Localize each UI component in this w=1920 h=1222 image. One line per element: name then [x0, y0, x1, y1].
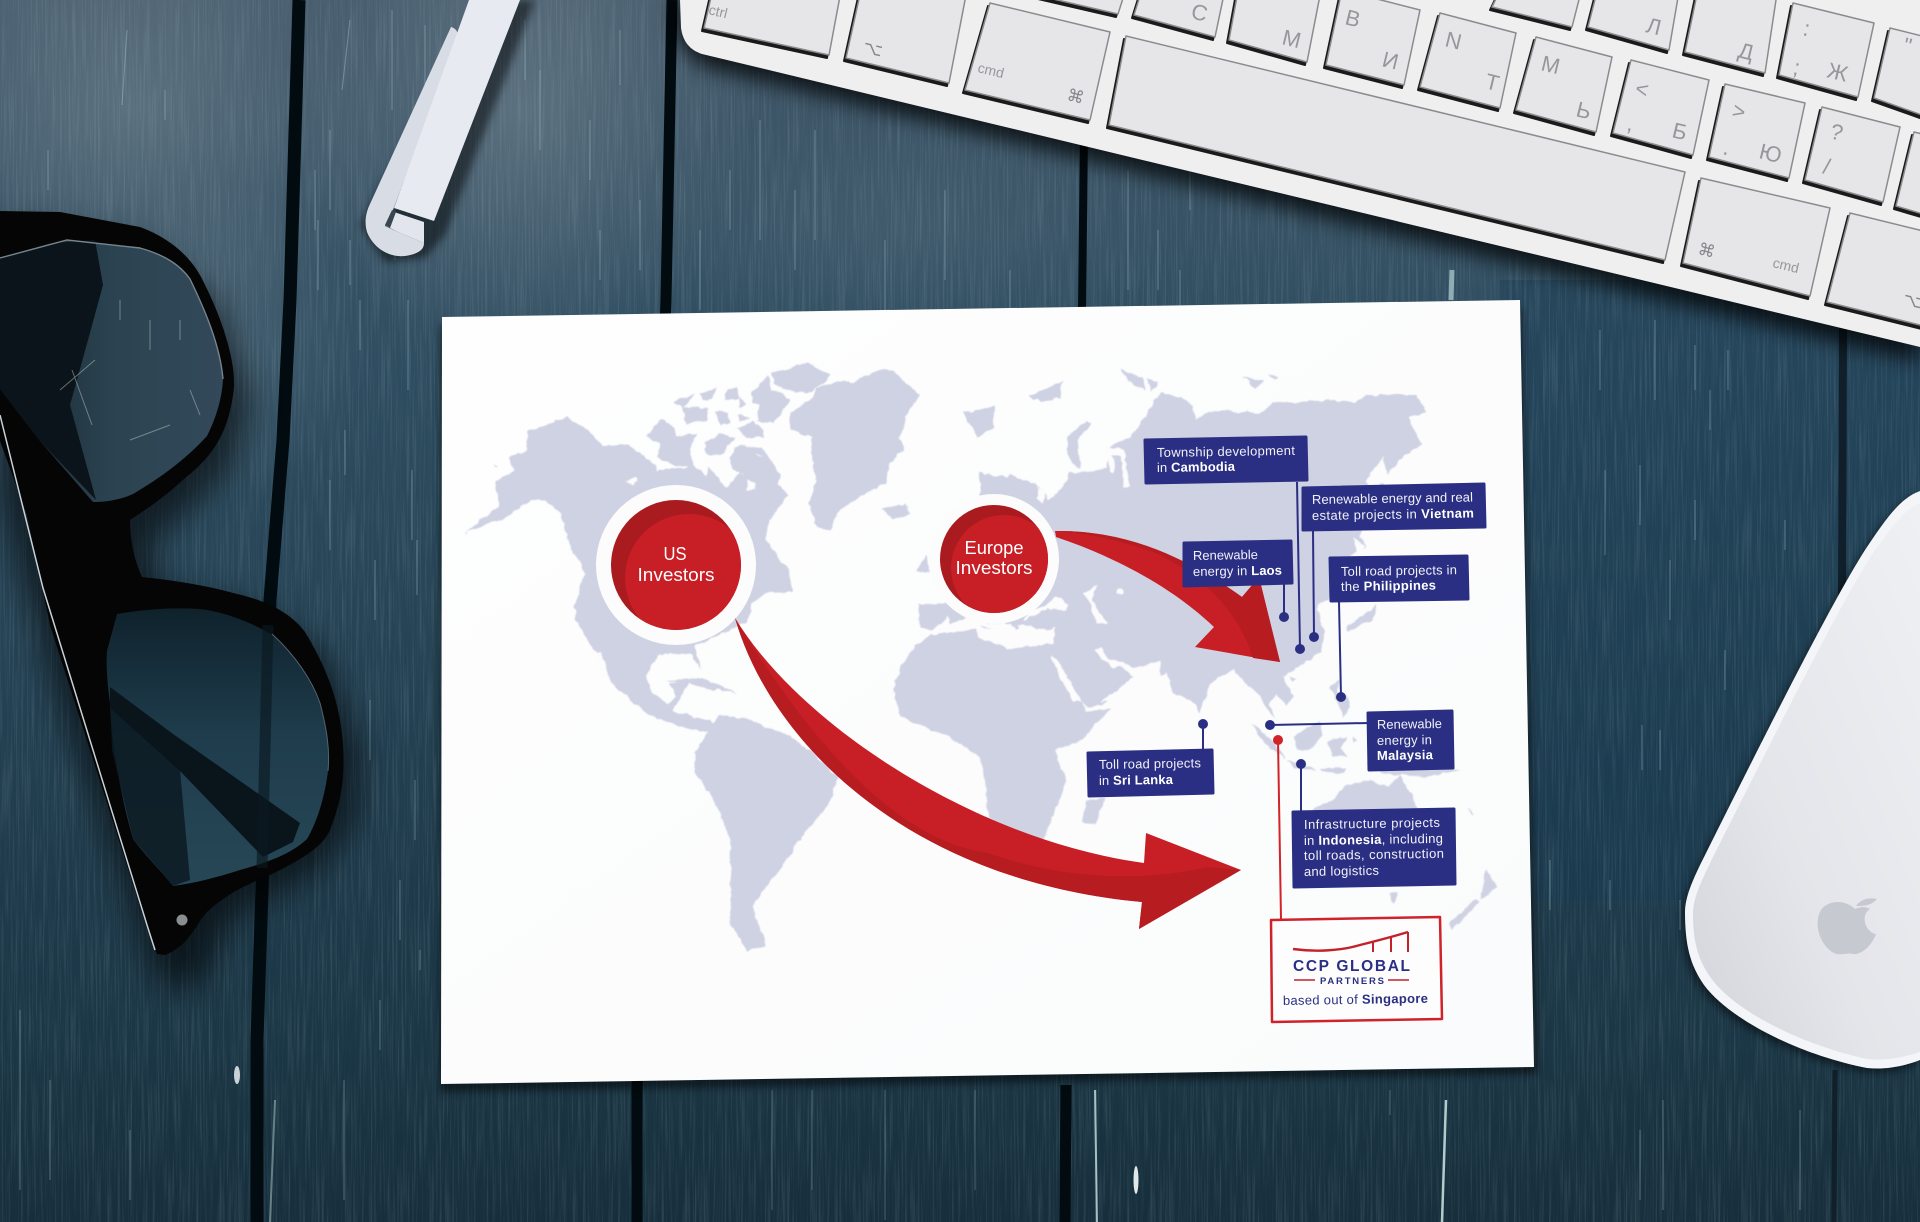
Arctic gulfs and seas: [1037, 446, 1390, 553]
Mediterranean and Middle East: [900, 560, 1160, 702]
Persian Gulf and Arabian Sea: [1095, 648, 1160, 702]
logo box: CCP Global Partners: [1271, 917, 1442, 1022]
key labels: ⌘: [1065, 85, 1086, 109]
circle: US Investors: [596, 485, 756, 645]
key labels: И: [1380, 47, 1401, 75]
Scandinavia: [980, 474, 1049, 517]
key labels: Д: [1736, 38, 1756, 65]
key labels: ctrl: [707, 1, 729, 21]
glasses shadow: [0, 225, 360, 985]
key labels: Т: [1483, 69, 1502, 96]
label: Philippines: [1330, 556, 1468, 601]
keyboard: [672, 0, 1920, 362]
key labels: М: [1280, 25, 1304, 53]
label: Indonesia: [1293, 809, 1455, 887]
label: Sri Lanka: Toll road projects: [1099, 755, 1202, 772]
Caspian Sea: [1083, 585, 1108, 623]
Mediterranean sea: [932, 617, 1055, 649]
key labels: М: [1539, 51, 1563, 79]
world map: [465, 363, 1497, 951]
Singapore pointer: [1273, 735, 1283, 919]
pen cap: [386, 212, 424, 243]
label: Laos: Renewable: [1193, 547, 1258, 563]
north Africa land: [900, 627, 1100, 700]
Indonesia pointer: [1296, 759, 1306, 811]
label: Sri Lanka: in Sri Lanka: [1099, 772, 1174, 788]
pen clip: [366, 27, 458, 256]
key labels: Л: [1644, 13, 1664, 40]
lower lens: [107, 608, 329, 886]
key labels: ⌘: [1696, 239, 1717, 263]
label: Vietnam: estate projects in Vietnam: [1312, 505, 1474, 523]
rim highlights: [0, 415, 155, 950]
Red Sea: [1051, 657, 1082, 702]
key labels: Б: [1670, 118, 1690, 145]
North America: [465, 417, 793, 733]
connector lines and location dots: [1198, 482, 1368, 919]
glasses: [0, 211, 360, 985]
arrow: Europe investors to Asia: [1055, 531, 1280, 662]
label: Cambodia: in Cambodia: [1157, 459, 1236, 475]
Aral Sea: [1117, 587, 1123, 594]
South East Asia and Oceania: [1250, 673, 1497, 928]
label: Malaysia: energy in: [1377, 732, 1432, 748]
Africa: [894, 627, 1110, 847]
key labels: В: [1343, 5, 1363, 32]
key labels: Ж: [1825, 58, 1851, 87]
key labels: .: [1721, 135, 1733, 160]
glasses frame: [0, 211, 344, 955]
label: Vietnam: Renewable energy and real: [1312, 489, 1473, 507]
key labels: cmd: [976, 59, 1006, 81]
label: Indonesia: in Indonesia, including: [1304, 831, 1443, 848]
Philippines pointer: [1336, 602, 1346, 702]
Sri Lanka pointer: [1198, 719, 1208, 750]
arm shadow through lower lens: [110, 700, 190, 886]
Black Sea: [1023, 595, 1068, 620]
key labels: Ю: [1757, 139, 1784, 168]
key labels: ;: [1791, 55, 1803, 80]
label: Philippines: Toll road projects in: [1341, 562, 1457, 579]
circle: US Investors: US: [664, 544, 686, 564]
key labels: [707, 0, 1920, 313]
key labels: ?: [1828, 119, 1846, 146]
pen: [360, 0, 535, 262]
logo box: CCP Global Partners: based out of Singapore: [1283, 991, 1428, 1008]
key labels: :: [1801, 16, 1813, 41]
Spain: [918, 603, 952, 632]
label: Cambodia: Township development: [1157, 443, 1295, 460]
label: Malaysia: [1368, 711, 1453, 770]
pen barrel: [394, 0, 520, 221]
label: Indonesia: and logistics: [1304, 863, 1380, 879]
arrow: US investors to South East Asia: [735, 618, 1241, 929]
label: Malaysia: Renewable: [1377, 716, 1442, 732]
label: Cambodia: [1145, 437, 1307, 483]
label: Indonesia: toll roads, construction: [1304, 846, 1444, 863]
Vietnam pointer: [1309, 531, 1319, 642]
key labels: ,: [1625, 111, 1637, 136]
key labels: /: [1821, 154, 1834, 180]
circle: Europe Investors: Investors: [956, 558, 1032, 578]
label: Philippines: the Philippines: [1341, 578, 1436, 594]
key labels: N: [1443, 27, 1464, 55]
key labels: <: [1633, 76, 1651, 103]
southern Europe and Turkey land: [943, 560, 1160, 673]
label: Laos: [1184, 541, 1292, 586]
temple arm seen through lower lens: [110, 687, 300, 857]
key labels: ⌥: [861, 37, 885, 61]
Iceland Svalbard UK islands: [882, 382, 1063, 572]
Italy and Greece: [980, 621, 1018, 630]
key labels: >: [1730, 98, 1748, 125]
label: Vietnam: [1303, 484, 1485, 530]
icon: bridge logo: [1293, 932, 1408, 952]
upper lens: [0, 240, 223, 502]
icon: apple logo: [1818, 898, 1877, 954]
label: Malaysia: Malaysia: [1377, 747, 1434, 763]
Canadian Arctic and Greenland: [637, 363, 920, 530]
Eurasia: [980, 368, 1427, 720]
Malaysia pointer: [1265, 720, 1368, 730]
key labels: Ь: [1574, 97, 1594, 124]
circle: Europe Investors: [929, 494, 1059, 624]
temple arm seen through upper lens: [0, 240, 103, 500]
Laos pointer: [1279, 584, 1289, 622]
key labels: ": [1901, 33, 1914, 59]
label: Sri Lanka: [1088, 750, 1213, 796]
circle: US Investors: Investors: [638, 565, 714, 585]
logo box: CCP Global Partners: CCP GLOBAL: [1293, 958, 1410, 975]
South America: [695, 715, 838, 951]
label: Indonesia: Infrastructure projects: [1304, 815, 1441, 832]
logo box: CCP Global Partners: PARTNERS: [1320, 976, 1384, 987]
paper sheet: [440, 300, 1538, 1092]
mouse: [1682, 491, 1920, 1073]
circle: Europe Investors: Europe: [964, 538, 1024, 558]
Cambodia pointer: [1295, 482, 1305, 654]
key labels: cmd: [1771, 254, 1801, 276]
label: Laos: energy in Laos: [1193, 563, 1282, 579]
